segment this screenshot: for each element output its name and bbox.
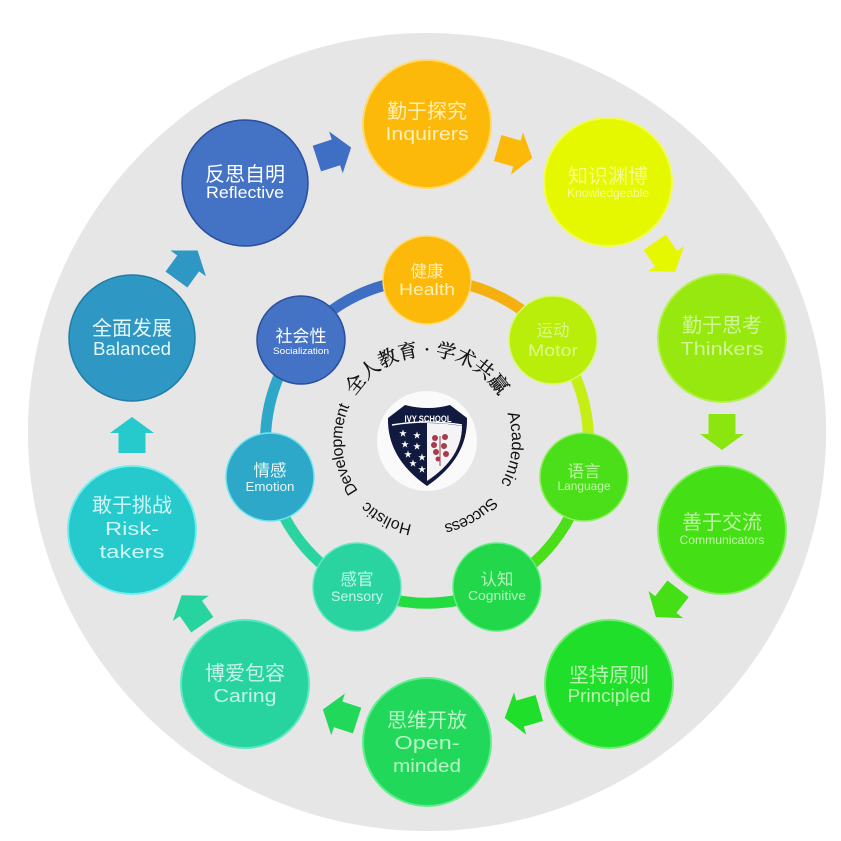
inner circle: Cognitive: Cognitive (468, 588, 526, 603)
curved text: Success: Success (444, 498, 498, 532)
outer circle: Thinkers: 勤于思考 (682, 314, 762, 337)
arrow: Thinkers to Communicators (700, 414, 744, 450)
inner circle: Health: 健康 (410, 262, 444, 281)
outer circle: Knowledgeable: 知识渊博 (568, 165, 648, 188)
outer circle: Risk-takers: Risk- (105, 518, 159, 539)
inner circle: Sensory (313, 543, 401, 631)
inner circle: Cognitive: 认知 (480, 570, 514, 589)
outer circle: Balanced: 全面发展 (92, 317, 172, 340)
inner circle: Language: 语言 (568, 462, 600, 481)
outer circle: Reflective: Reflective (206, 184, 284, 202)
inner circle: Motor: 运动 (536, 321, 570, 340)
curved text: Holistic: Holistic (362, 502, 411, 536)
logo: Ivy School shield: ★ (418, 465, 426, 474)
outer circle: Open-minded: minded (393, 755, 461, 776)
outer circle: Open-minded: Open- (394, 732, 460, 753)
arrow: Reflective to Inquirers (310, 127, 358, 179)
outer circle: Balanced (69, 275, 195, 401)
logo: Ivy School shield: ★ (413, 431, 421, 440)
logo: Ivy School shield: ★ (413, 442, 421, 451)
arrow: Principled to Open-minded (499, 687, 545, 739)
logo: Ivy School shield: ★ (404, 450, 412, 459)
arrow: Knowledgeable to Thinkers (637, 230, 693, 284)
inner circle: Health: Health (399, 281, 455, 299)
outer circle: Reflective (182, 120, 308, 246)
inner circle: Language: Language (558, 479, 611, 493)
inner circle: Motor (509, 296, 597, 384)
outer circle: Communicators (658, 466, 786, 594)
inner circle: Socialization (257, 296, 345, 384)
outer circle: Caring: Caring (214, 685, 276, 706)
arrow: Open-minded to Caring (316, 689, 364, 741)
logo: Ivy School shield: ★ (399, 429, 407, 438)
outer circle: Inquirers: Inquirers (386, 123, 468, 144)
logo: Ivy School shield: IVY SCHOOL (404, 414, 452, 424)
inner circle: Health (383, 236, 471, 324)
outer circle: Thinkers (658, 274, 786, 402)
curved text: Development: Development (332, 403, 358, 496)
outer circle: Caring: 博爱包容 (205, 662, 285, 685)
outer circle: Communicators: 善于交流 (682, 511, 762, 534)
inner circle: Socialization: 社会性 (276, 327, 326, 346)
logo: Ivy School shield: ★ (409, 459, 417, 468)
inner ring connecting circles (266, 280, 588, 603)
outer circle: Communicators: Communicators (680, 533, 764, 547)
arrow: Balanced to Reflective (159, 238, 215, 292)
inner circle: Sensory: Sensory (331, 589, 383, 604)
logo: Ivy School shield: ★ (401, 440, 409, 449)
outer circle: Balanced: Balanced (93, 339, 171, 359)
inner circle: Sensory: 感官 (340, 570, 374, 589)
outer circle: Knowledgeable (544, 118, 672, 246)
outer circle: Open-minded: 思维开放 (387, 709, 467, 732)
outer circle: Risk-takers: takers (100, 541, 164, 562)
outer circle: Thinkers: Thinkers (680, 338, 764, 359)
outer circle: Reflective: 反思自明 (205, 163, 285, 186)
logo: Ivy School shield: ★ (418, 453, 426, 462)
arrow: Inquirers to Knowledgeable (492, 127, 538, 179)
outer circle: Inquirers (363, 60, 491, 188)
inner circle: Motor: Motor (528, 341, 578, 360)
outer circle: Risk-takers (68, 466, 196, 594)
outer circle: Inquirers: 勤于探究 (387, 100, 467, 123)
inner circle: Socialization: Socialization (273, 346, 329, 357)
inner circle: Emotion (226, 433, 314, 521)
inner circle: Emotion: 情感 (254, 461, 286, 480)
inner circle: Cognitive (453, 543, 541, 631)
curved text: Chinese heading: 全人教育 · 学术共赢 (346, 340, 510, 396)
arrow: Caring to Risk-takers (164, 583, 220, 637)
outer circle: Open-minded (363, 678, 491, 806)
outer circle: Risk-takers: 敢于挑战 (92, 494, 172, 517)
outer circle: Principled: Principled (568, 686, 650, 706)
logo: Ivy School shield (377, 391, 477, 491)
arrow: Risk-takers to Balanced (110, 417, 154, 453)
arrow: Communicators to Principled (639, 575, 695, 631)
outer circle: Principled: 坚持原则 (569, 664, 649, 687)
outer circle: Principled (545, 620, 673, 748)
outer circle: Knowledgeable: Knowledgeable (567, 186, 649, 200)
curved text: Academic: Academic (502, 413, 524, 486)
inner circle: Emotion: Emotion (246, 479, 294, 494)
inner circle: Language (540, 433, 628, 521)
outer circle: Caring (181, 620, 309, 748)
